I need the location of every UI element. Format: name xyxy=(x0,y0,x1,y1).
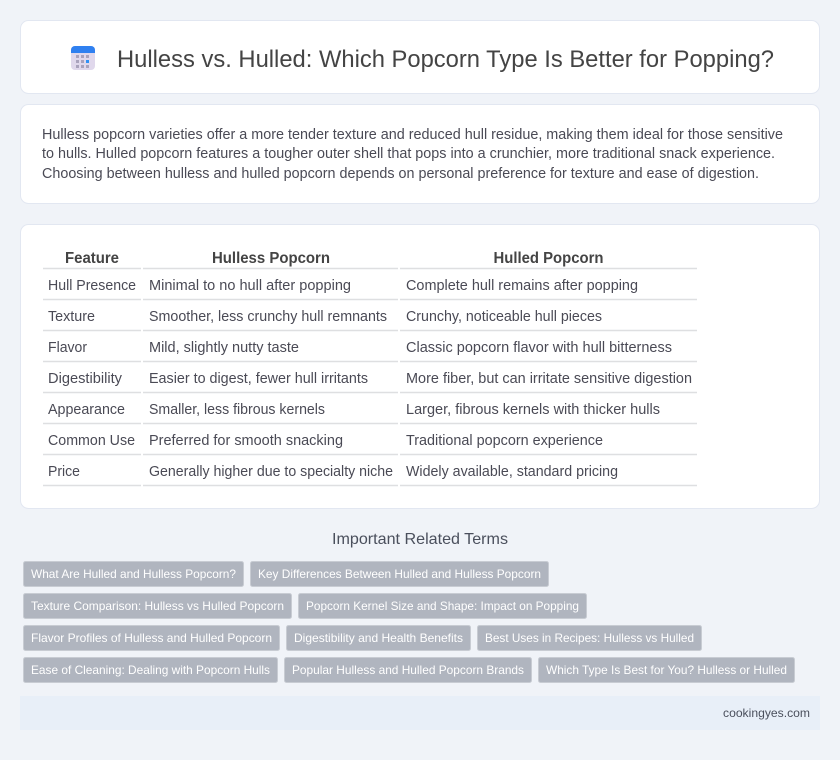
row: price: Widely available, standard pricing xyxy=(406,464,618,480)
row: digestibility: Digestibility xyxy=(48,371,123,387)
tag cloud xyxy=(24,562,794,682)
row: texture: Texture xyxy=(48,309,95,325)
tag xyxy=(24,562,244,586)
tag: Texture Comparison: Hulless vs Hulled Popcorn xyxy=(31,599,284,613)
tag xyxy=(250,562,548,586)
table header: Feature xyxy=(65,250,119,267)
intro text: to hulls. Hulled popcorn features a tougher outer shell that pops into a crunchier, more traditional snack experience. xyxy=(42,146,775,162)
tag xyxy=(24,658,278,682)
row: digestibility xyxy=(43,371,697,392)
tag xyxy=(538,658,794,682)
row: hull presence: Minimal to no hull after popping xyxy=(149,278,351,294)
row: texture: Crunchy, noticeable hull pieces xyxy=(406,309,602,325)
row: hull presence xyxy=(43,278,697,300)
tag xyxy=(24,626,280,650)
row: texture xyxy=(43,309,697,330)
table header xyxy=(43,250,697,268)
table header: Hulled Popcorn xyxy=(494,250,604,267)
row: digestibility: Easier to digest, fewer hull irritants xyxy=(149,371,368,387)
icon: calendar xyxy=(71,46,95,70)
row: common use xyxy=(43,433,697,454)
row: flavor: Mild, slightly nutty taste xyxy=(149,340,299,356)
intro text: Choosing between hulless and hulled popcorn depends on personal preference for texture and ease of digestion. xyxy=(42,166,759,182)
tag: Digestibility and Health Benefits xyxy=(294,631,463,645)
panel: title card xyxy=(20,20,820,94)
row: common use: Preferred for smooth snacking xyxy=(149,433,343,449)
tag xyxy=(24,594,292,618)
tag: Popcorn Kernel Size and Shape: Impact on Popping xyxy=(306,599,579,613)
tag xyxy=(284,658,532,682)
row: price: Generally higher due to specialty niche xyxy=(149,464,393,480)
intro text xyxy=(42,127,783,182)
table header: Hulless Popcorn xyxy=(212,250,330,267)
row: common use: Traditional popcorn experience xyxy=(406,433,603,449)
footer source text: cookingyes.com xyxy=(723,706,810,720)
tag: Popular Hulless and Hulled Popcorn Brands xyxy=(292,663,524,677)
tag: Ease of Cleaning: Dealing with Popcorn Hulls xyxy=(31,663,270,677)
tag xyxy=(298,594,586,618)
row: appearance: Smaller, less fibrous kernels xyxy=(149,402,325,418)
row: flavor xyxy=(43,340,697,362)
tag: What Are Hulled and Hulless Popcorn? xyxy=(31,567,236,581)
row: price xyxy=(43,464,697,486)
tag xyxy=(286,626,470,650)
tag xyxy=(478,626,702,650)
row: flavor: Flavor xyxy=(48,340,87,356)
tag: Flavor Profiles of Hulless and Hulled Popcorn xyxy=(31,631,272,645)
footer xyxy=(20,696,820,730)
heading: important related terms: Important Related Terms xyxy=(332,531,508,548)
row: hull presence: Hull Presence xyxy=(48,278,136,294)
row: digestibility: More fiber, but can irritate sensitive digestion xyxy=(406,371,692,387)
tag: Which Type Is Best for You? Hulless or Hulled xyxy=(546,663,787,677)
tag: Key Differences Between Hulled and Hulless Popcorn xyxy=(258,567,541,581)
row: appearance xyxy=(43,402,697,424)
row: appearance: Larger, fibrous kernels with thicker hulls xyxy=(406,402,660,418)
panel: comparison table xyxy=(20,224,820,508)
tag: Best Uses in Recipes: Hulless vs Hulled xyxy=(485,631,694,645)
row: hull presence: Complete hull remains after popping xyxy=(406,278,638,294)
row: common use: Common Use xyxy=(48,433,135,449)
title: Hulless vs. Hulled: Which Popcorn Type Is Better for Popping? xyxy=(117,46,774,73)
row: flavor: Classic popcorn flavor with hull bitterness xyxy=(406,340,672,356)
intro text: Hulless popcorn varieties offer a more tender texture and reduced hull residue, making them ideal for those sensitive xyxy=(42,127,783,143)
panel: introduction xyxy=(20,104,820,204)
row: price: Price xyxy=(48,464,80,480)
row: texture: Smoother, less crunchy hull remnants xyxy=(149,309,387,325)
row: appearance: Appearance xyxy=(48,402,125,418)
